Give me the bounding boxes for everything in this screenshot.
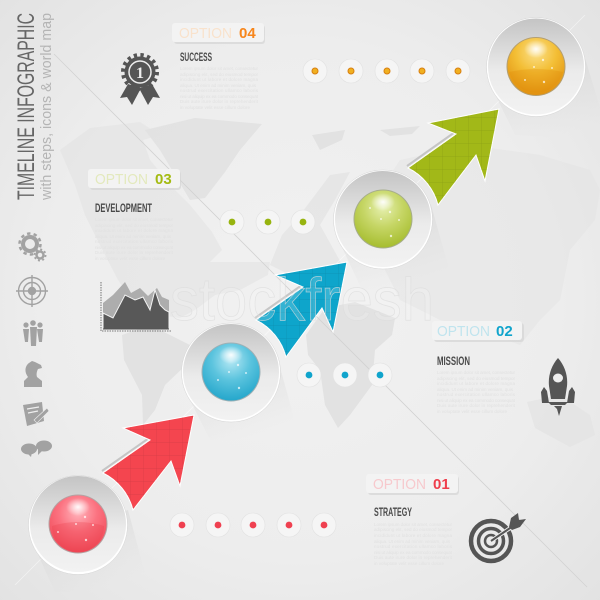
body text: Lorem ipsum dolor sit amet, consectetur [180, 66, 258, 71]
title block [13, 13, 55, 201]
step 1: red disc [28, 476, 128, 574]
body text: nisi ut aliquip ex ea commodo consequat [95, 245, 174, 250]
body text: aliqua. Ut enim ad minim veniam, quis [374, 539, 451, 544]
icon: rocket [541, 358, 575, 416]
body text: adipiscing elit, sed do eiusmod tempor [437, 376, 516, 381]
body text [437, 370, 516, 414]
label: option 04 [172, 23, 265, 44]
body text: nostrud exercitation ullamco laboris [437, 392, 516, 397]
body text: nostrud exercitation ullamco laboris [374, 544, 453, 549]
body text: incididunt ut labore et dolore magna [95, 228, 173, 233]
icon: chess knight [24, 361, 42, 387]
heading: DEVELOPMENT [95, 201, 152, 215]
label: option 02: 02 [496, 323, 513, 340]
label: option 01: OPTION [373, 476, 426, 493]
step 4: yellow disc [486, 18, 586, 116]
label: option 02: OPTION [437, 323, 490, 340]
body text: incididunt ut labore et dolore magna [374, 533, 452, 538]
heading: SUCCESS [180, 50, 212, 64]
body text: adipiscing elit, sed do eiusmod tempor [180, 72, 258, 77]
subtitle: with steps, icons & world map [38, 13, 55, 201]
label: option 04: 04 [239, 25, 256, 42]
icon: award rosette [120, 55, 160, 105]
world map [60, 118, 600, 447]
arrow: red [102, 415, 194, 510]
body text: Duis aute irure dolor in reprehenderit [437, 403, 516, 408]
heading: MISSION [437, 354, 470, 368]
body text: nisi ut aliquip ex ea commodo consequat [437, 398, 516, 403]
body text: adipiscing elit, sed do eiusmod tempor [95, 223, 174, 228]
body text: Lorem ipsum dolor sit amet, consectetur [95, 217, 174, 222]
body text: aliqua. Ut enim ad minim veniam, quis [437, 387, 514, 392]
label: option 02 [432, 321, 524, 342]
body text: in voluptate velit esse cillum dolore [437, 409, 507, 414]
panel: option 04 [172, 23, 265, 110]
dots row: red [170, 513, 336, 537]
icon: gears [20, 234, 46, 261]
body text: nisi ut aliquip ex ea commodo consequat [180, 94, 259, 99]
arrow: green [407, 109, 499, 205]
icon: target with dart [471, 513, 526, 561]
label: option 04: OPTION [179, 25, 232, 42]
icon: people group [23, 320, 43, 346]
body text: aliqua. Ut enim ad minim veniam, quis [95, 234, 172, 239]
panel: option 03 [88, 169, 181, 261]
left icon column [16, 234, 52, 457]
watermark: stockfresh [170, 266, 434, 333]
body text: nostrud exercitation ullamco laboris [95, 239, 174, 244]
step 2: blue disc [182, 323, 280, 422]
arrow: blue [255, 262, 347, 357]
label: option 01: 01 [433, 476, 450, 493]
body text: incididunt ut labore et dolore magna [437, 381, 515, 386]
body text: adipiscing elit, sed do eiusmod tempor [374, 527, 452, 532]
icon: award rosette: 1 [136, 65, 144, 82]
body text: Lorem ipsum dolor sit amet, consectetur [437, 370, 516, 375]
dots row: blue [297, 363, 392, 387]
dots row: yellow [303, 59, 470, 83]
icon: notepad and pen [23, 402, 49, 426]
label: option 03: 03 [155, 171, 172, 188]
dots row: green [220, 210, 315, 234]
body text: incididunt ut labore et dolore magna [180, 77, 258, 82]
body text: Duis aute irure dolor in reprehenderit [95, 250, 174, 255]
body text: Duis aute irure dolor in reprehenderit [180, 99, 259, 104]
body text: nisi ut aliquip ex ea commodo consequat [374, 550, 453, 555]
panel: option 02 [432, 321, 524, 414]
label: option 03 [88, 169, 181, 190]
icon: speech bubbles [21, 440, 52, 457]
body text: in voluptate velit esse cillum dolore [374, 561, 444, 566]
body text [180, 66, 259, 110]
heading: STRATEGY [374, 505, 412, 519]
panel: option 01 [366, 474, 459, 566]
icon: crosshair [16, 275, 48, 307]
body text: Lorem ipsum dolor sit amet, consectetur [374, 522, 452, 527]
body text [374, 522, 453, 566]
body text [95, 217, 174, 261]
body text: in voluptate velit esse cillum dolore [180, 105, 250, 110]
label: option 01 [366, 474, 459, 495]
body text: Duis aute irure dolor in reprehenderit [374, 555, 453, 560]
body text: in voluptate velit esse cillum dolore [95, 256, 165, 261]
step 3: green disc [334, 170, 432, 269]
body text: aliqua. Ut enim ad minim veniam, quis [180, 83, 257, 88]
body text: nostrud exercitation ullamco laboris [180, 88, 259, 93]
label: option 03: OPTION [95, 171, 148, 188]
area chart [101, 282, 172, 331]
